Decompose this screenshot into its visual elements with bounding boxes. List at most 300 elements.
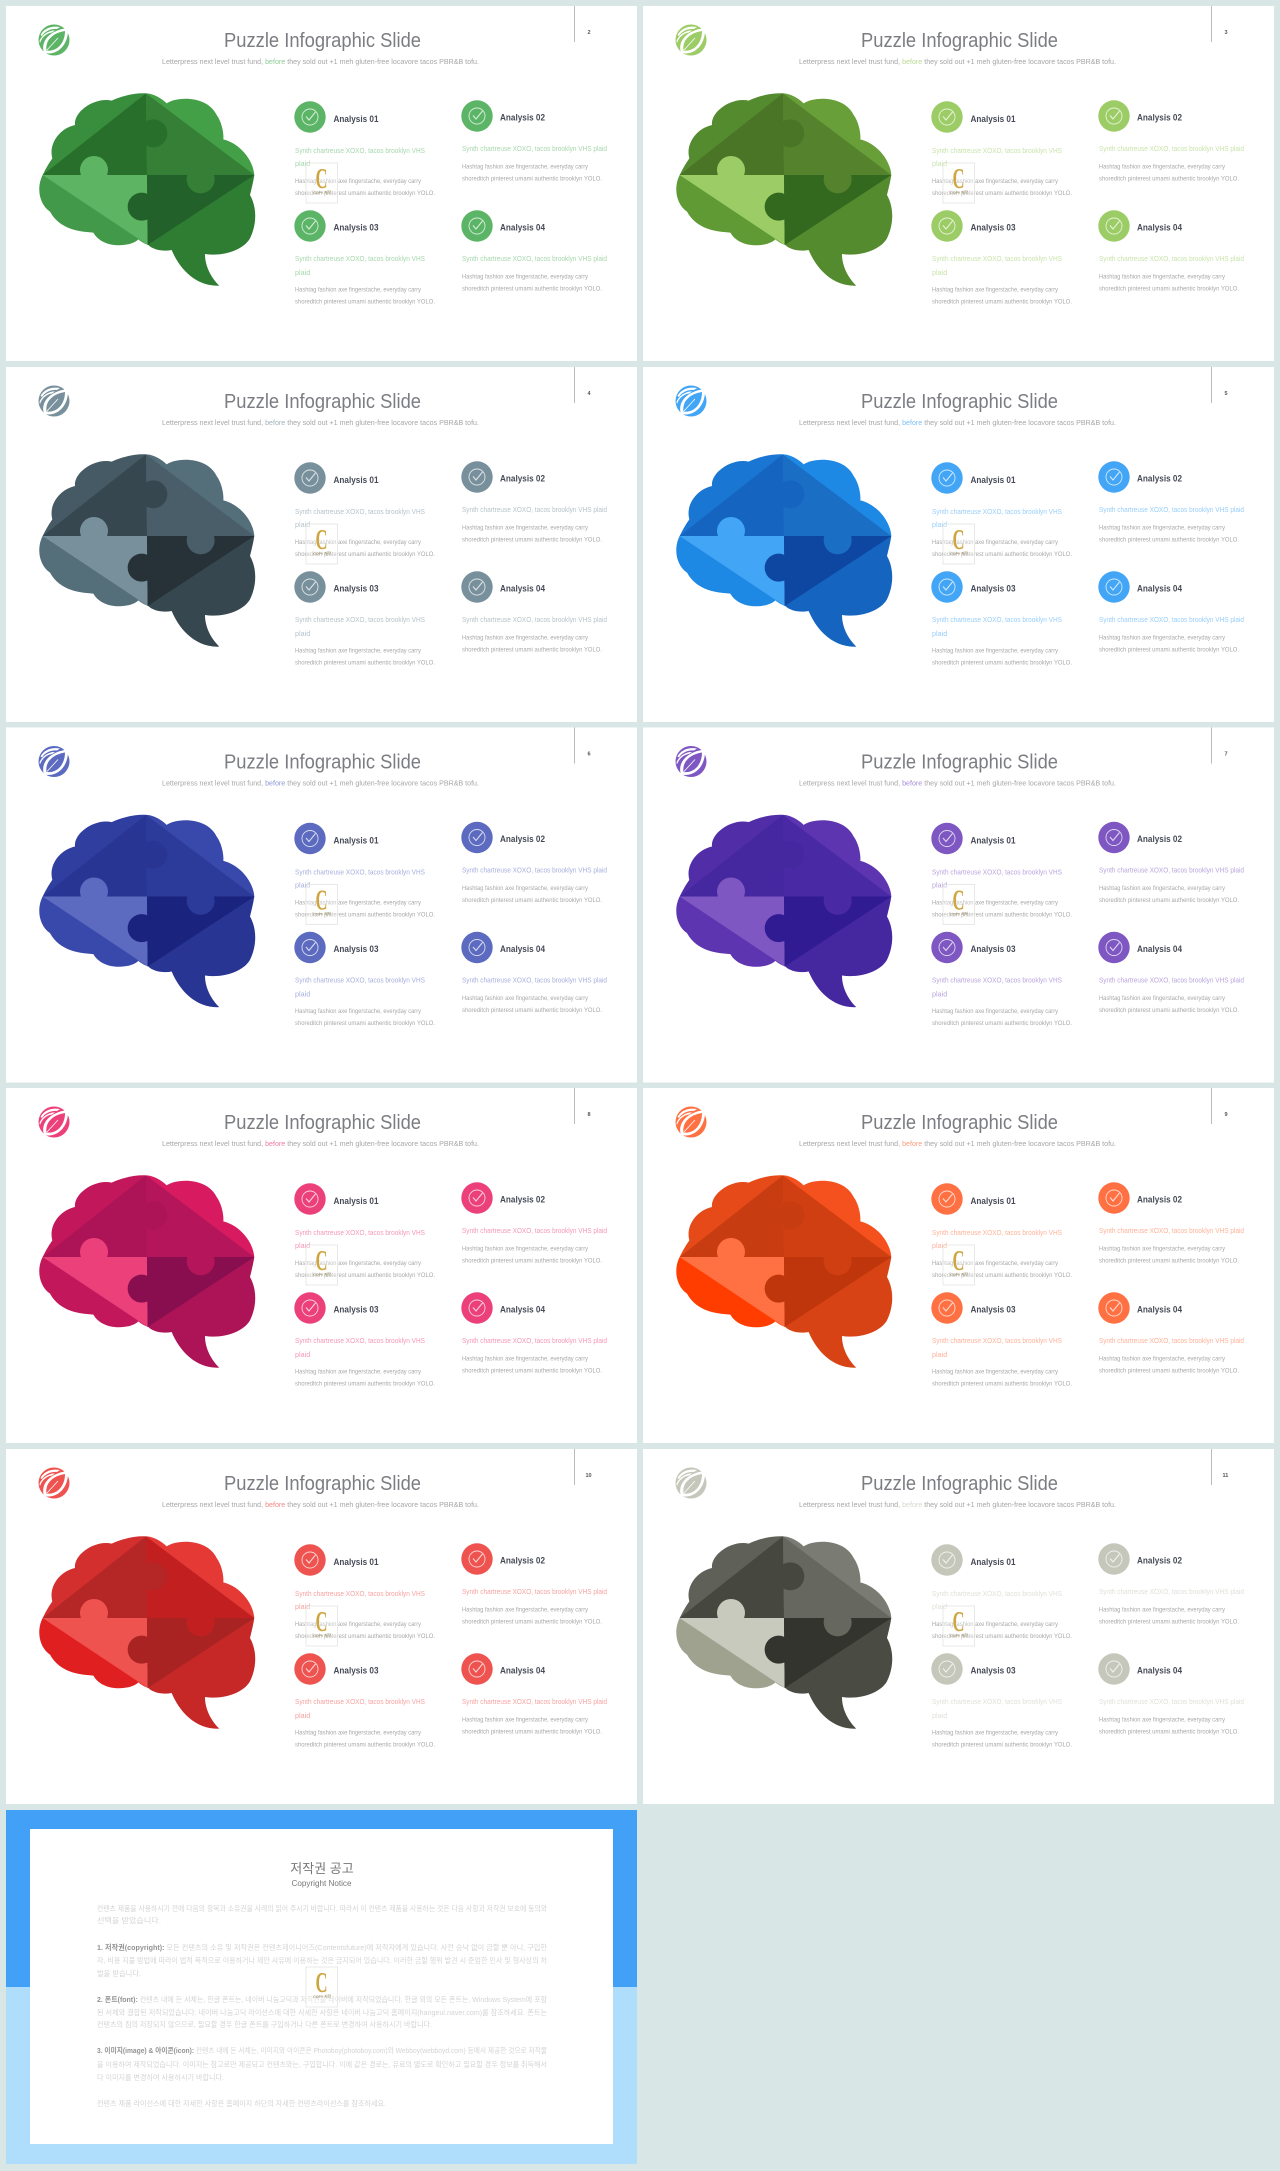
item 03 [931,1653,1072,1748]
item 02 [461,1543,607,1626]
item 02: Hashtag fashion axe fingerstache, everyday carry [1099,164,1226,170]
logo [676,386,706,416]
copyright body: 선택을 받았습니다. [97,1915,161,1925]
item 02: Analysis 02 [500,1194,545,1204]
item 04: Hashtag fashion axe fingerstache, everyday carry [462,1356,589,1362]
item 04: shoreditch pinterest umami authentic brooklyn YOLO. [462,1007,602,1014]
item 02 [1098,1543,1244,1626]
item 04: Synth chartreuse XOXO, tacos brooklyn VHS plaid [462,976,607,984]
item 02: Hashtag fashion axe fingerstache, everyday carry [462,1606,589,1614]
item 01: Synth chartreuse XOXO, tacos brooklyn VHS [932,146,1062,155]
item 04: Analysis 04 [1137,222,1182,232]
item 04 [461,1653,607,1736]
item 01: Hashtag fashion axe fingerstache, everyday carry [295,1621,422,1628]
item 03 [931,932,1072,1027]
item 03: Hashtag fashion axe fingerstache, everyday carry [932,286,1059,294]
item 03: shoreditch pinterest umami authentic brooklyn YOLO. [295,1742,435,1748]
logo [38,1106,70,1138]
watermark [943,1245,974,1285]
page number: 5 [1224,391,1228,397]
item 04: shoreditch pinterest umami authentic brooklyn YOLO. [1099,1368,1239,1374]
item 02: Synth chartreuse XOXO, tacos brooklyn VHS plaid [462,1226,607,1235]
item 04 [461,571,607,654]
subtitle: Letterpress next level trust fund, before they sold out +1 meh gluten-free locavore tacos PBR&B tofu. [799,778,1116,788]
item 01: plaid [295,159,310,168]
item 01: Synth chartreuse XOXO, tacos brooklyn VHS [295,507,425,516]
item 01: Analysis 01 [334,1196,378,1206]
logo [38,1468,70,1498]
item 01: Analysis 01 [334,1557,378,1567]
item 01: Analysis 01 [334,114,378,124]
item 03: Analysis 03 [970,584,1016,594]
item 03: shoreditch pinterest umami authentic brooklyn YOLO. [932,298,1072,306]
item 02: shoreditch pinterest umami authentic brooklyn YOLO. [1099,176,1239,182]
item 01: Hashtag fashion axe fingerstache, everyday carry [932,1260,1059,1267]
item 02: shoreditch pinterest umami authentic brooklyn YOLO. [462,897,602,904]
item 03: plaid [295,268,310,277]
logo [38,746,70,777]
title: Puzzle Infographic Slide [861,1112,1058,1134]
panel: slide 10 red [6,1449,637,1804]
panel: copyright notice [6,1810,637,2164]
item 04: Analysis 04 [1137,944,1182,954]
page number: 9 [1224,1112,1228,1118]
brain puzzle [676,454,892,647]
item 02: Analysis 02 [500,474,545,484]
item 04 [461,210,607,292]
item 03: Hashtag fashion axe fingerstache, everyday carry [295,1008,422,1015]
item 02: Synth chartreuse XOXO, tacos brooklyn VHS plaid [1099,1226,1244,1235]
item 01 [931,462,1072,558]
item 02: Analysis 02 [1137,1194,1182,1204]
logo [676,1468,706,1498]
item 01: plaid [295,1241,310,1250]
item 04: Analysis 04 [500,1304,545,1314]
item 02: Analysis 02 [500,834,545,844]
panel: slide 5 blue [643,367,1274,722]
watermark [306,524,338,564]
item 03 [931,1292,1072,1388]
item 01: plaid [932,520,947,529]
item 03: Analysis 03 [334,584,378,594]
item 01: shoreditch pinterest umami authentic brooklyn YOLO. [295,912,435,918]
item 02: Hashtag fashion axe fingerstache, everyday carry [462,524,589,532]
title: Puzzle Infographic Slide [224,1112,421,1134]
item 03: Analysis 03 [334,222,378,232]
item 02: Analysis 02 [500,1556,545,1566]
item 04 [1098,571,1244,654]
item 03: Synth chartreuse XOXO, tacos brooklyn VHS [295,615,425,624]
item 01: Hashtag fashion axe fingerstache, everyday carry [295,539,422,546]
item 04: Hashtag fashion axe fingerstache, everyday carry [1099,1716,1226,1724]
item 03: Synth chartreuse XOXO, tacos brooklyn VHS [932,1336,1062,1345]
item 02: Analysis 02 [500,112,545,122]
item 04: Analysis 04 [500,1666,545,1676]
item 02: Synth chartreuse XOXO, tacos brooklyn VHS plaid [462,1587,607,1596]
item 02: Hashtag fashion axe fingerstache, everyday carry [1099,885,1226,892]
watermark [943,163,974,203]
item 01: plaid [932,159,947,168]
item 02: Analysis 02 [1137,474,1182,484]
item 01: Synth chartreuse XOXO, tacos brooklyn VHS [932,1228,1062,1237]
logo [38,386,70,416]
item 02: shoreditch pinterest umami authentic brooklyn YOLO. [1099,897,1239,904]
item 04 [1098,932,1244,1014]
subtitle: Letterpress next level trust fund, before they sold out +1 meh gluten-free locavore tacos PBR&B tofu. [799,1139,1116,1148]
copyright body: 컨텐츠의 점의 저장되지 않으므로, 필요할 경우 한글 폰트를 구입하거나 다른 폰트로 변경하여 사용하시기 바랍니다. [97,2019,432,2029]
copyright body: 다 이미지를 변경하여 사용하시기 바랍니다. [97,2072,224,2082]
item 01: Hashtag fashion axe fingerstache, everyday carry [295,1260,422,1267]
item 03: Hashtag fashion axe fingerstache, everyday carry [295,1368,422,1376]
copyright body: 2. 폰트(font): 컨텐츠 내에 든 서체는, 한글 폰트는, 네이버 나눔고딕과 저작권을 네이버에 저작되었습니다. 한글 외의 모든 폰트는, Windows System에 포함 [97,1994,547,2004]
item 03: Hashtag fashion axe fingerstache, everyday carry [932,648,1059,654]
item 03: plaid [932,990,947,998]
title: Puzzle Infographic Slide [224,391,421,413]
item 03: Analysis 03 [334,1304,378,1314]
logo [676,1106,706,1138]
item 03 [294,932,435,1027]
item 01 [294,462,435,558]
item 03: Analysis 03 [334,1666,378,1676]
item 02: Hashtag fashion axe fingerstache, everyday carry [1099,524,1226,532]
item 02: Hashtag fashion axe fingerstache, everyday carry [462,1246,589,1252]
item 03: plaid [295,629,310,638]
item 04: Synth chartreuse XOXO, tacos brooklyn VHS plaid [462,1336,607,1345]
brain puzzle [39,1536,255,1729]
item 01: plaid [295,1602,310,1611]
item 04: Hashtag fashion axe fingerstache, everyday carry [1099,1356,1226,1362]
watermark [306,884,338,924]
item 02: Analysis 02 [1137,1556,1182,1566]
item 03: Synth chartreuse XOXO, tacos brooklyn VHS [932,976,1062,984]
item 04: shoreditch pinterest umami authentic brooklyn YOLO. [462,1728,602,1736]
item 03: Synth chartreuse XOXO, tacos brooklyn VHS [932,1697,1062,1706]
watermark [306,163,338,203]
item 03: shoreditch pinterest umami authentic brooklyn YOLO. [932,1020,1072,1027]
item 01: Synth chartreuse XOXO, tacos brooklyn VHS [932,507,1062,516]
item 03: Synth chartreuse XOXO, tacos brooklyn VHS [295,254,425,263]
item 03: plaid [932,629,947,638]
brain puzzle [39,815,255,1007]
brain puzzle [676,815,892,1007]
item 01: Hashtag fashion axe fingerstache, everyday carry [932,539,1059,546]
item 04 [1098,210,1244,292]
item 01: Hashtag fashion axe fingerstache, everyday carry [295,900,422,906]
item 03: plaid [295,1711,310,1720]
item 04: shoreditch pinterest umami authentic brooklyn YOLO. [462,286,602,292]
item 02 [1098,822,1244,904]
panel: slide 6 indigo [6,728,637,1082]
item 02 [461,822,607,904]
watermark [943,524,974,564]
item 01 [294,823,435,918]
copyright body: 된 서체와 결합된 저작되었습니다. 네이버 나눔고딕 라이선스에 대한 사세한 사항은 네이버 나눔고딕 홈페이지(hangeul.naver.com)를 참조하세요. 폰트는 [97,2007,547,2017]
item 03: Hashtag fashion axe fingerstache, everyday carry [295,286,422,294]
item 01 [931,1183,1072,1279]
item 01: Analysis 01 [970,1557,1016,1567]
item 01: shoreditch pinterest umami authentic brooklyn YOLO. [932,912,1072,918]
item 03: shoreditch pinterest umami authentic brooklyn YOLO. [295,660,435,666]
item 01: Synth chartreuse XOXO, tacos brooklyn VHS [295,1589,425,1598]
item 04 [1098,1653,1244,1736]
item 03: Hashtag fashion axe fingerstache, everyday carry [295,648,422,654]
item 03: shoreditch pinterest umami authentic brooklyn YOLO. [295,298,435,306]
item 03: shoreditch pinterest umami authentic brooklyn YOLO. [295,1380,435,1388]
item 01: shoreditch pinterest umami authentic brooklyn YOLO. [295,190,435,197]
page number: 6 [588,752,591,758]
item 01 [294,1544,435,1640]
item 02: Synth chartreuse XOXO, tacos brooklyn VHS plaid [1099,1587,1244,1596]
brain puzzle [676,1536,892,1729]
item 01: Synth chartreuse XOXO, tacos brooklyn VHS [295,1228,425,1237]
copyright body: 을 이용하여 제작되었습니다. 이미지는 참고로만 제공되고 컨텐츠와는, 구입합니다. 이에 같은 경로는, 유료의 별도로 확인하고 필요할 경우 정보를 취득해서 [97,2059,547,2069]
item 02: shoreditch pinterest umami authentic brooklyn YOLO. [1099,1258,1239,1264]
item 04: Synth chartreuse XOXO, tacos brooklyn VHS plaid [1099,1697,1244,1706]
title: Puzzle Infographic Slide [861,752,1058,774]
item 04: Hashtag fashion axe fingerstache, everyday carry [462,995,589,1002]
item 01 [294,1183,435,1279]
item 02: Hashtag fashion axe fingerstache, everyday carry [462,885,589,892]
panel: slide 4 blue grey [6,367,637,722]
item 03: plaid [295,990,310,998]
item 04: Synth chartreuse XOXO, tacos brooklyn VHS plaid [462,615,607,624]
item 01: plaid [932,1602,947,1611]
item 04 [461,932,607,1014]
item 04: Analysis 04 [500,222,545,232]
item 03: Analysis 03 [970,1304,1016,1314]
item 01: Hashtag fashion axe fingerstache, everyday carry [295,178,422,185]
item 01: Analysis 01 [970,475,1016,485]
brain puzzle [39,454,255,647]
title: Puzzle Infographic Slide [224,752,421,774]
item 02 [1098,1182,1244,1264]
item 01: shoreditch pinterest umami authentic brooklyn YOLO. [295,1633,435,1640]
subtitle: Letterpress next level trust fund, before they sold out +1 meh gluten-free locavore tacos PBR&B tofu. [799,57,1116,66]
item 02 [1098,461,1244,544]
copyright body: 자, 비용 지불 방법에 따라이 법적 목적으로 이용하거나 제안 사유에 이용하는 것은 금지되어 있습니다. 이러한 금할 행위 발견 시 준엄한 민사 및 형사상의 처 [97,1955,547,1965]
item 02: Hashtag fashion axe fingerstache, everyday carry [462,164,589,170]
item 03: Analysis 03 [334,944,378,954]
item 04: shoreditch pinterest umami authentic brooklyn YOLO. [1099,1007,1239,1014]
brain puzzle [39,1175,255,1368]
item 03 [294,571,435,666]
page number: 11 [1222,1473,1228,1479]
item 03: Hashtag fashion axe fingerstache, everyday carry [932,1368,1059,1376]
page number: 2 [588,30,591,36]
panel: slide 3 light green [643,6,1274,361]
item 04: Synth chartreuse XOXO, tacos brooklyn VHS plaid [462,1697,607,1706]
item 03: Synth chartreuse XOXO, tacos brooklyn VHS [295,1697,425,1706]
item 04: Hashtag fashion axe fingerstache, everyday carry [1099,995,1226,1002]
item 01: Synth chartreuse XOXO, tacos brooklyn VHS [932,868,1062,876]
item 01: Analysis 01 [970,836,1016,846]
item 02: Synth chartreuse XOXO, tacos brooklyn VHS plaid [462,866,607,874]
item 04: Analysis 04 [1137,584,1182,594]
item 01: shoreditch pinterest umami authentic brooklyn YOLO. [295,551,435,558]
page number: 7 [1224,752,1228,758]
item 03 [294,1653,435,1748]
item 04: Analysis 04 [500,944,545,954]
subtitle: Letterpress next level trust fund, before they sold out +1 meh gluten-free locavore tacos PBR&B tofu. [799,1500,1116,1509]
subtitle: Letterpress next level trust fund, before they sold out +1 meh gluten-free locavore tacos PBR&B tofu. [162,1139,479,1148]
copyright body: 컨텐츠 제품 라이선스에 대한 자세한 사항은 홈페이지 하단의 자세한 컨텐츠라이선스를 참조하세요. [97,2098,386,2108]
item 02: shoreditch pinterest umami authentic brooklyn YOLO. [462,176,602,182]
item 03 [294,1292,435,1388]
item 04: shoreditch pinterest umami authentic brooklyn YOLO. [1099,1728,1239,1736]
copyright body [97,1903,547,2108]
item 03: Hashtag fashion axe fingerstache, everyday carry [932,1008,1059,1015]
subtitle: Letterpress next level trust fund, before they sold out +1 meh gluten-free locavore tacos PBR&B tofu. [799,418,1116,427]
item 03: shoreditch pinterest umami authentic brooklyn YOLO. [932,660,1072,666]
item 03 [931,210,1072,306]
item 02: Synth chartreuse XOXO, tacos brooklyn VHS plaid [1099,144,1244,153]
item 03 [931,571,1072,666]
item 01 [294,101,435,197]
item 04: Hashtag fashion axe fingerstache, everyday carry [462,274,589,280]
logo [676,746,706,777]
title: Puzzle Infographic Slide [861,30,1058,52]
item 03: plaid [932,1711,947,1720]
item 01 [931,1544,1072,1640]
item 03: Synth chartreuse XOXO, tacos brooklyn VHS [932,615,1062,624]
item 04: shoreditch pinterest umami authentic brooklyn YOLO. [1099,646,1239,654]
item 03: shoreditch pinterest umami authentic brooklyn YOLO. [295,1020,435,1027]
item 01: Analysis 01 [970,1196,1016,1206]
item 04: Synth chartreuse XOXO, tacos brooklyn VHS plaid [462,254,607,263]
item 02 [1098,100,1244,182]
item 01: Analysis 01 [970,114,1016,124]
item 01: shoreditch pinterest umami authentic brooklyn YOLO. [932,1272,1072,1279]
copyright body: 3. 이미지(image) & 아이콘(icon): 컨텐츠 내에 든 서체는, 이미지와 아이콘은 Photoboy(photoboy.com)와 Webboy(webboyd.com) 등에서 제공한 것으로 저작물 [97,2045,547,2055]
item 04: shoreditch pinterest umami authentic brooklyn YOLO. [462,1368,602,1374]
item 01: plaid [295,520,310,529]
item 02: Hashtag fashion axe fingerstache, everyday carry [1099,1246,1226,1252]
item 01 [931,101,1072,197]
item 02 [461,1182,607,1264]
item 01: Analysis 01 [334,836,378,846]
subtitle: Letterpress next level trust fund, before they sold out +1 meh gluten-free locavore tacos PBR&B tofu. [162,778,479,788]
item 03: Hashtag fashion axe fingerstache, everyday carry [295,1730,422,1736]
item 04: Analysis 04 [500,584,545,594]
item 03: shoreditch pinterest umami authentic brooklyn YOLO. [932,1380,1072,1388]
item 02: shoreditch pinterest umami authentic brooklyn YOLO. [462,1258,602,1264]
item 02: shoreditch pinterest umami authentic brooklyn YOLO. [1099,1618,1239,1626]
item 03: plaid [932,1350,947,1359]
item 04: Synth chartreuse XOXO, tacos brooklyn VHS plaid [1099,254,1244,263]
item 04: Hashtag fashion axe fingerstache, everyday carry [462,1716,589,1724]
item 03: plaid [932,268,947,277]
item 04: Synth chartreuse XOXO, tacos brooklyn VHS plaid [1099,615,1244,624]
panel: slide 7 purple [643,728,1274,1082]
item 04: Hashtag fashion axe fingerstache, everyday carry [1099,634,1226,642]
copyright heading: 저작권 공고 [290,1861,354,1876]
item 03: Hashtag fashion axe fingerstache, everyday carry [932,1730,1059,1736]
page number: 8 [588,1112,591,1118]
item 03: Synth chartreuse XOXO, tacos brooklyn VHS [932,254,1062,263]
item 02: shoreditch pinterest umami authentic brooklyn YOLO. [462,1618,602,1626]
item 03: Analysis 03 [970,222,1016,232]
item 02: Analysis 02 [1137,112,1182,122]
item 03: Synth chartreuse XOXO, tacos brooklyn VHS [295,1336,425,1345]
title: Puzzle Infographic Slide [224,1473,421,1495]
panel: slide 11 grey [643,1449,1274,1804]
page number: 3 [1224,30,1228,36]
item 03: Analysis 03 [970,1666,1016,1676]
item 04: Hashtag fashion axe fingerstache, everyday carry [462,634,589,642]
item 01 [931,823,1072,918]
item 03 [294,210,435,306]
item 03: plaid [295,1350,310,1359]
watermark [943,884,974,924]
page number: 10 [586,1473,592,1479]
item 01: Hashtag fashion axe fingerstache, everyday carry [932,1621,1059,1628]
logo [38,24,70,56]
item 01: shoreditch pinterest umami authentic brooklyn YOLO. [932,190,1072,197]
panel: slide 9 orange [643,1088,1274,1443]
item 01: shoreditch pinterest umami authentic brooklyn YOLO. [932,551,1072,558]
item 04: Analysis 04 [1137,1666,1182,1676]
watermark [306,1606,338,1646]
item 04: Hashtag fashion axe fingerstache, everyday carry [1099,274,1226,280]
watermark [943,1606,974,1646]
copyright body: 컨텐츠 제품을 사용하시기 전에 다음의 항목과 소유권을 사례의 읽어 주시기 바랍니다. 따라서 이 컨텐츠 제품을 사용하는 것은 다음 사항과 저작권 보호에 동의와 [97,1903,547,1913]
item 04: shoreditch pinterest umami authentic brooklyn YOLO. [462,646,602,654]
watermark [306,1967,338,2007]
item 01: Analysis 01 [334,475,378,485]
title: Puzzle Infographic Slide [224,30,421,52]
item 02: Synth chartreuse XOXO, tacos brooklyn VHS plaid [1099,866,1244,874]
panel: slide 8 pink [6,1088,637,1443]
item 01: shoreditch pinterest umami authentic brooklyn YOLO. [295,1272,435,1279]
item 02: Synth chartreuse XOXO, tacos brooklyn VHS plaid [1099,505,1244,514]
item 01: Synth chartreuse XOXO, tacos brooklyn VHS [932,1589,1062,1598]
item 03: Synth chartreuse XOXO, tacos brooklyn VHS [295,976,425,984]
item 01: Hashtag fashion axe fingerstache, everyday carry [932,900,1059,906]
item 03: shoreditch pinterest umami authentic brooklyn YOLO. [932,1742,1072,1748]
item 01: Synth chartreuse XOXO, tacos brooklyn VHS [295,146,425,155]
item 02: Synth chartreuse XOXO, tacos brooklyn VHS plaid [462,505,607,514]
watermark [306,1245,338,1285]
panel: slide 2 green [6,6,637,361]
subtitle: Letterpress next level trust fund, before they sold out +1 meh gluten-free locavore tacos PBR&B tofu. [162,418,479,427]
item 02: Synth chartreuse XOXO, tacos brooklyn VHS plaid [462,144,607,153]
item 04: Analysis 04 [1137,1304,1182,1314]
brain puzzle [676,93,892,286]
title: Puzzle Infographic Slide [861,1473,1058,1495]
copyright subheading: Copyright Notice [292,1879,352,1888]
item 04 [1098,1292,1244,1374]
item 02 [461,100,607,182]
item 02: Analysis 02 [1137,834,1182,844]
brain puzzle [676,1175,892,1368]
item 01: plaid [295,880,310,890]
copyright body: 1. 저작권(copyright): 모든 컨텐츠의 소유 및 저작권은 컨텐츠제이니어즈(Contentsfuture)에 저작자에게 있습니다. 사전 승낙 없이 금할 뿐 아니, 구입한 [97,1942,547,1952]
page number: 4 [588,391,592,397]
brain puzzle [39,93,255,286]
item 01: Hashtag fashion axe fingerstache, everyday carry [932,178,1059,185]
item 01: plaid [932,880,947,890]
subtitle: Letterpress next level trust fund, before they sold out +1 meh gluten-free locavore tacos PBR&B tofu. [162,57,479,66]
logo [676,24,706,56]
item 04: shoreditch pinterest umami authentic brooklyn YOLO. [1099,286,1239,292]
item 02 [461,461,607,544]
item 04 [461,1292,607,1374]
item 04: Synth chartreuse XOXO, tacos brooklyn VHS plaid [1099,1336,1244,1345]
item 01: shoreditch pinterest umami authentic brooklyn YOLO. [932,1633,1072,1640]
copyright body: 벌을 받습니다. [97,1968,141,1978]
title: Puzzle Infographic Slide [861,391,1058,413]
item 02: Hashtag fashion axe fingerstache, everyday carry [1099,1606,1226,1614]
